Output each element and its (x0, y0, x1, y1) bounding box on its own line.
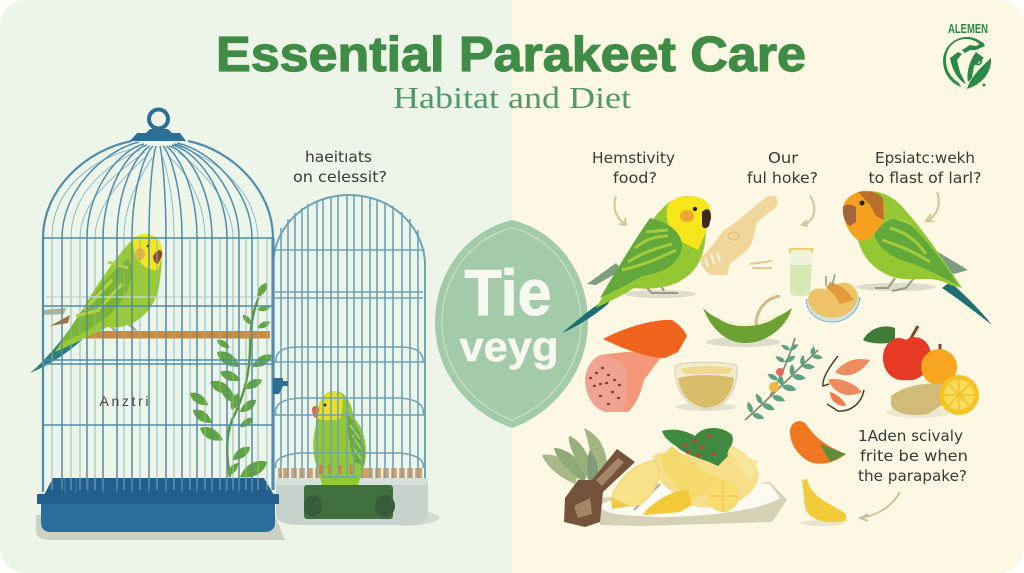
food: cheese wedge (886, 383, 950, 418)
question: habitat: haeitıats (305, 148, 372, 166)
question: food right: Epsiatc:wekh (875, 149, 975, 167)
large cage perch (77, 331, 270, 338)
arrow: bottom question (860, 492, 900, 521)
question: food middle: Our (768, 149, 799, 167)
icon: central shield badge (435, 220, 588, 428)
question: food right (868, 149, 982, 187)
icon: logo: ALEMEN (948, 21, 988, 36)
food: yellow banana (800, 479, 846, 526)
question: food right: to flast of larl? (868, 169, 982, 187)
question: food middle (747, 149, 818, 187)
food: lemon slices on plate (611, 461, 659, 509)
food: carrot (603, 320, 687, 358)
question: food left: food? (613, 169, 657, 187)
food: bark wood (564, 449, 635, 527)
arrow: middle food question (802, 196, 814, 226)
badge word: veyg: veyg (460, 323, 558, 370)
label: cage: Anztri (100, 393, 148, 409)
bird: small parakeet in small cage (312, 391, 366, 485)
cage shadow (36, 515, 285, 540)
food: orange fruit (921, 344, 957, 385)
question: bottom right (858, 427, 968, 485)
small cage base (276, 478, 439, 526)
large cage wire frame (43, 141, 273, 492)
food: parsley garnish (662, 428, 733, 466)
plant in large cage (187, 281, 274, 483)
bird: yellow-headed parakeet (562, 196, 711, 333)
food: cracker bone shape (700, 196, 778, 275)
large cage tray (37, 478, 279, 532)
question: bottom right: frite be when (860, 447, 968, 465)
food: glass of juice (790, 248, 812, 296)
food: sage leaves (542, 428, 608, 484)
food: bowl of broth (675, 362, 737, 411)
food: apple and leaf (863, 326, 931, 380)
question: habitat: on celessit? (293, 168, 387, 186)
question: bottom right: the parapake? (858, 467, 967, 485)
food: plate of fruit (600, 442, 787, 526)
question: food left: Hemstivity (592, 149, 675, 167)
food: lemon slice (939, 375, 979, 415)
question: habitat (293, 148, 387, 186)
badge word: Tie: Tie (464, 256, 552, 329)
food: herb sprig (745, 338, 823, 421)
small cage bird perch (278, 468, 422, 478)
icon: logo (943, 21, 991, 89)
icon: cage ring and cap (130, 110, 186, 141)
arrow: right food question (926, 192, 939, 221)
bird: orange-headed parakeet (843, 191, 992, 325)
food: orange mango (790, 421, 846, 464)
question: food left (592, 149, 675, 187)
food: orange leaf sprig (823, 356, 870, 411)
food: meat slice (585, 351, 665, 412)
bird: parakeet on perch in large cage (30, 234, 163, 373)
question: bottom right: 1Aden scivaly (858, 427, 963, 445)
small cage wire frame (273, 195, 425, 478)
arrow: left food question (614, 196, 626, 225)
food: bowl of fruit (806, 274, 860, 322)
subtitle: Habitat and Diet (393, 80, 631, 115)
title: Essential Parakeet Care (216, 28, 806, 82)
icon: cage latch (273, 378, 288, 394)
question: food middle: ful hoke? (747, 169, 818, 187)
food: green banana (703, 296, 792, 347)
